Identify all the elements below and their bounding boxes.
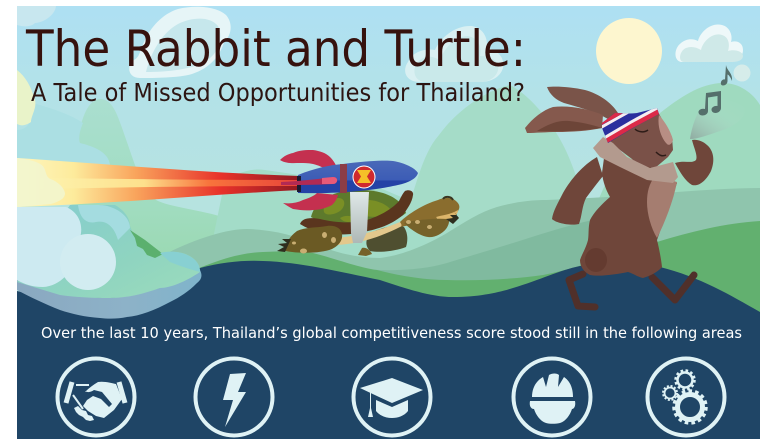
rocket <box>280 150 418 243</box>
musical note: beamed <box>698 91 721 116</box>
rabbit belly <box>647 176 677 238</box>
rabbit upper ear <box>547 87 618 119</box>
mountain: left <box>72 99 218 252</box>
rabbit right arm <box>675 140 713 185</box>
rabbit torso <box>580 158 677 278</box>
turtle front flipper <box>404 219 449 237</box>
cloud teal body <box>17 205 200 298</box>
rabbit head <box>608 112 673 168</box>
turtle leg spots <box>292 232 336 254</box>
turtle <box>277 190 459 256</box>
rocket centre fin <box>281 177 337 185</box>
title: The Rabbit and Turtle: <box>25 20 526 78</box>
rocket body <box>298 161 418 193</box>
icon: gears <box>648 358 724 436</box>
icon: hard hat worker <box>514 358 590 436</box>
hill: bright green <box>200 221 760 312</box>
turtle shell scutes <box>324 198 392 222</box>
rabbit back leg <box>569 274 595 307</box>
sun <box>596 18 662 84</box>
cloud green spikes <box>130 230 163 258</box>
icon: graduation cap <box>354 358 430 436</box>
turtle rear leg <box>285 226 342 253</box>
rocket fin tip <box>322 177 337 184</box>
turtle rear claws <box>277 239 291 252</box>
rabbit <box>525 87 713 307</box>
rabbit lower ear <box>525 106 603 133</box>
cloud: behind Turtle <box>405 26 503 82</box>
cloud: lower left <box>17 205 201 319</box>
musical note: single <box>721 65 732 86</box>
cloud right lobe <box>160 252 200 272</box>
turtle front claws <box>446 212 459 224</box>
mountain: centre <box>214 170 427 258</box>
rocket bottom fin <box>283 193 338 210</box>
emblem: ASEAN <box>352 166 376 188</box>
rocket nozzle <box>297 176 301 192</box>
turtle belly <box>334 222 402 245</box>
rocket ring band <box>340 164 347 193</box>
cloud: behind the title <box>129 7 231 78</box>
cloud puffs <box>17 207 116 290</box>
rabbit left arm <box>552 157 603 225</box>
cloud: top right <box>675 24 750 82</box>
turtle head and neck <box>400 198 459 227</box>
cloud blue top lobes <box>78 205 130 240</box>
sky background <box>17 6 760 292</box>
rabbit snout <box>658 115 673 145</box>
cloud: upper left exhaust <box>17 104 110 165</box>
mountain: right <box>600 83 760 198</box>
mountain: centre right <box>412 85 576 225</box>
cloud tint left <box>17 70 35 125</box>
rabbit front leg <box>652 275 694 300</box>
rabbit neck ruff <box>593 137 678 183</box>
strap <box>350 192 369 243</box>
rocket top fin <box>280 150 337 170</box>
turtle flipper spots <box>406 220 432 229</box>
sound cone <box>690 99 745 139</box>
rocket exhaust flame <box>17 158 302 207</box>
hill: left mid <box>171 188 760 270</box>
subtitle: A Tale of Missed Opportunities for Thailand? <box>31 78 525 107</box>
navy ground <box>17 261 760 439</box>
icon: lightning bolt <box>196 358 272 436</box>
turtle shell <box>311 190 406 222</box>
rabbit closed eye and mouth <box>635 129 666 156</box>
turtle front under-shell <box>366 226 407 252</box>
turtle small foot <box>358 248 372 256</box>
rabbit hip shade <box>585 248 607 272</box>
intro text: Over the last 10 years, Thailand’s global competitiveness score stood still in the following areas <box>41 324 742 342</box>
icon: handshake <box>58 358 134 436</box>
hill: darker overlap <box>378 221 590 280</box>
turtle shell rim <box>300 190 413 234</box>
cloud: top left <box>17 6 56 26</box>
rabbit Thai flag headband <box>595 100 665 150</box>
cloud blue wave band <box>17 270 201 319</box>
